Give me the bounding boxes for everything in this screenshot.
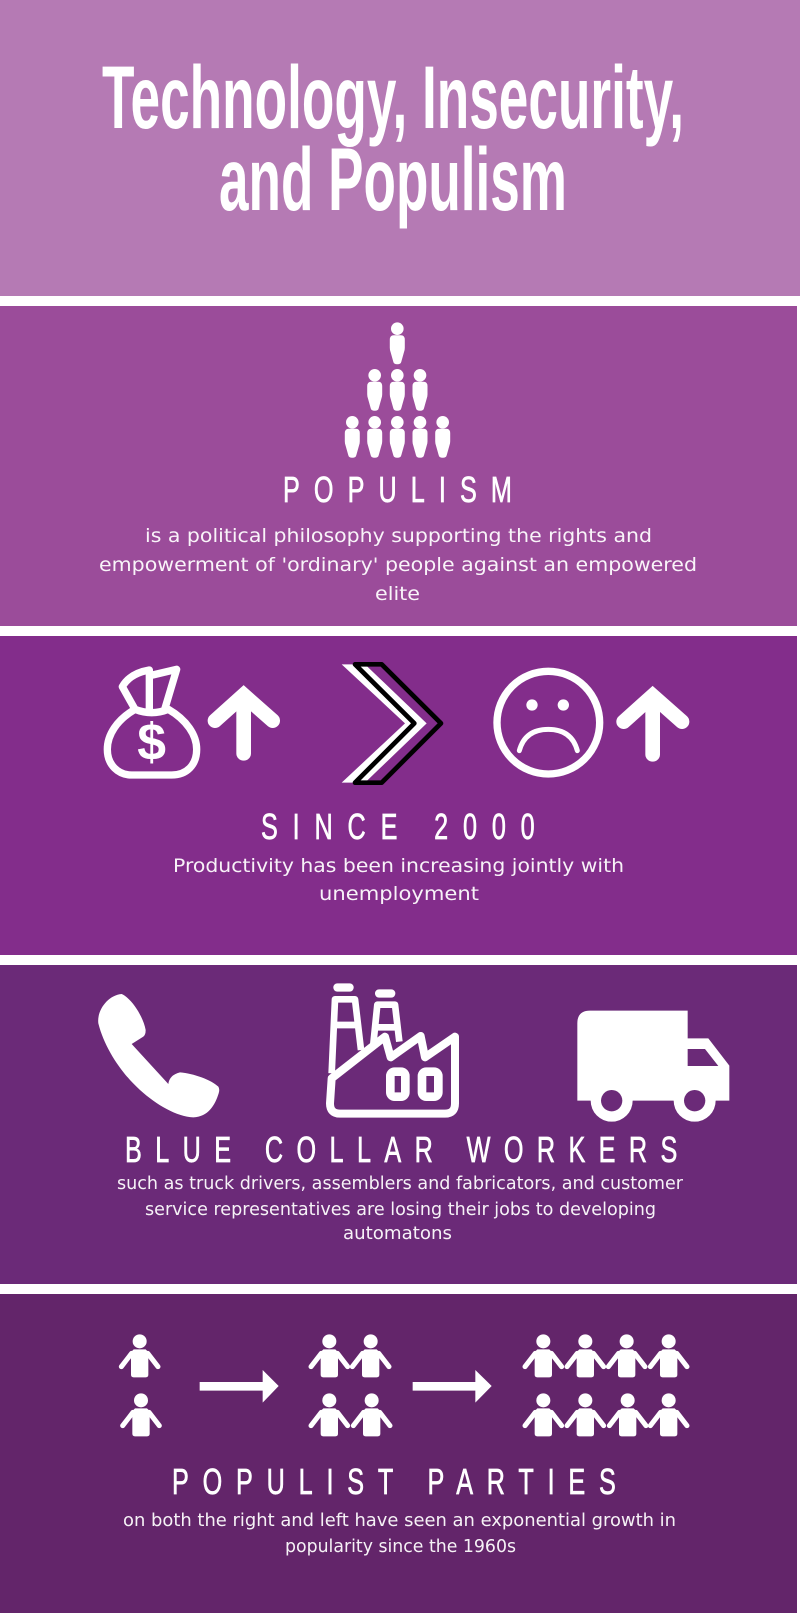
arrow: growth one xyxy=(200,1370,279,1403)
text: growth in popularity xyxy=(123,1510,676,1557)
icon: sad face xyxy=(497,671,600,774)
panel: title xyxy=(0,0,800,296)
heading: populism: POPULISM xyxy=(283,470,512,510)
panel: blue collar workers xyxy=(0,965,797,1284)
arrow: unemployment up xyxy=(624,696,682,754)
text: populism definition xyxy=(99,525,697,605)
icon: four people xyxy=(311,1334,390,1436)
panel: populism xyxy=(0,306,797,626)
heading: blue collar workers: BLUE COLLAR WORKERS xyxy=(125,1130,677,1170)
icon: money bag: $ xyxy=(137,712,166,770)
icon: two people xyxy=(121,1334,159,1436)
text: jobs lost to automatons: such as truck drivers, assemblers and fabricators, and customer xyxy=(117,1173,684,1194)
text: growth in popularity: popularity since the 1960s xyxy=(285,1536,516,1557)
panel: populist parties xyxy=(0,1294,797,1613)
panel: since 2000 xyxy=(0,636,797,955)
icon: money bag xyxy=(107,669,197,775)
text: populism definition: empowerment of 'ordinary' people against an empowered xyxy=(99,554,697,576)
text: jobs lost to automatons xyxy=(117,1173,684,1244)
heading: since 2000: SINCE 2000 xyxy=(261,807,535,847)
text: jobs lost to automatons: automatons xyxy=(343,1223,452,1244)
text: populism definition: is a political philosophy supporting the rights and xyxy=(145,525,652,547)
arrow: productivity up xyxy=(215,695,273,753)
title xyxy=(102,47,684,229)
icon: truck xyxy=(577,1011,729,1122)
icon: telephone xyxy=(98,994,219,1117)
icon: pyramid of people xyxy=(345,322,450,458)
icon: chevron xyxy=(342,664,441,783)
text: jobs lost to automatons: service representatives are losing their jobs to developing xyxy=(145,1199,656,1220)
icon: eight people xyxy=(525,1334,687,1436)
text: productivity and unemployment: unemployment xyxy=(319,883,479,905)
text: productivity and unemployment xyxy=(173,855,624,905)
text: growth in popularity: on both the right and left have seen an exponential growth in xyxy=(123,1510,676,1531)
arrow: growth two xyxy=(413,1370,492,1403)
text: productivity and unemployment: Productivity has been increasing jointly with xyxy=(173,855,624,877)
text: populism definition: elite xyxy=(375,583,420,605)
title: and Populism xyxy=(219,129,567,229)
icon: factory xyxy=(330,983,455,1114)
heading: populist parties: POPULIST PARTIES xyxy=(172,1462,616,1502)
